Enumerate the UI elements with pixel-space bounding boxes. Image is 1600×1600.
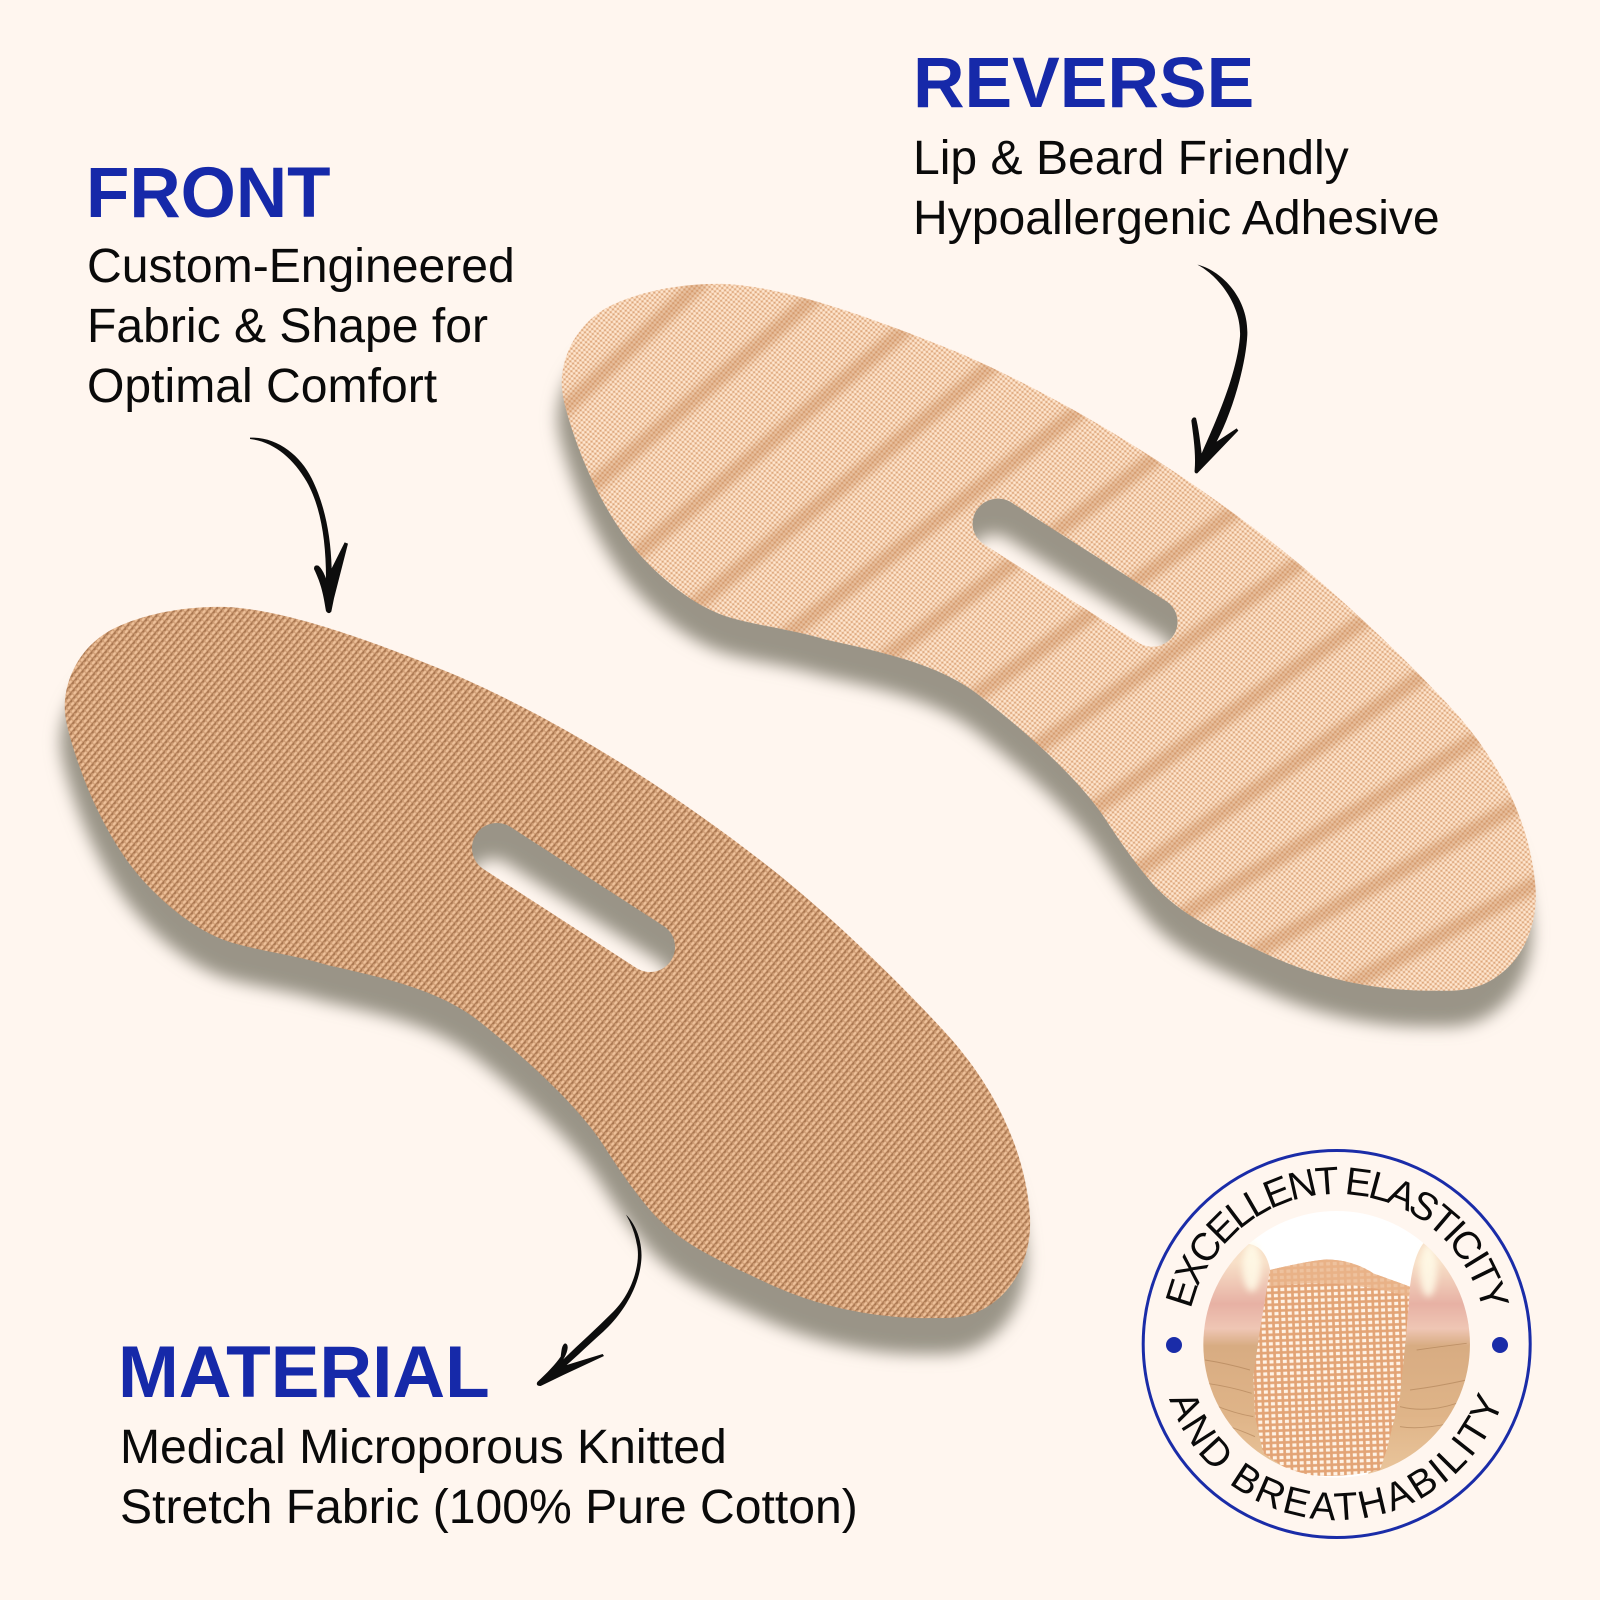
badge ring <box>1143 1150 1530 1538</box>
text: front description: Custom-Engineered <box>87 239 515 293</box>
front patch shadow <box>61 643 1026 1354</box>
stretched mesh fabric <box>1253 1259 1410 1476</box>
left finger <box>1203 1244 1285 1468</box>
reverse patch shadow <box>558 320 1532 1027</box>
arrow: reverse <box>1191 265 1247 473</box>
badge: elasticity and breathability <box>1142 1149 1532 1539</box>
finger wrinkles <box>1205 1343 1467 1437</box>
reverse patch fabric <box>562 284 1536 991</box>
reverse adhesive stripes <box>520 280 1550 1014</box>
heading: front: FRONT <box>86 154 331 233</box>
front patch fabric <box>65 607 1030 1318</box>
heading: reverse: REVERSE <box>913 43 1254 123</box>
badge photo: fingers stretching mesh <box>1203 1211 1470 1478</box>
right finger <box>1368 1244 1470 1474</box>
text: front description: Fabric & Shape for <box>87 299 488 353</box>
panel: reverse patch <box>520 280 1550 1027</box>
text: material description: Stretch Fabric (100% Pure Cotton) <box>120 1480 858 1534</box>
text: reverse description: Lip & Beard Friendly <box>913 131 1349 185</box>
arrow: material <box>537 1215 642 1386</box>
text: material description: Medical Microporous Knitted <box>120 1420 727 1474</box>
text: front description: Optimal Comfort <box>87 359 438 413</box>
arrow: front <box>250 438 348 613</box>
nail highlights <box>1242 1242 1437 1297</box>
badge text top: EXCELLENT ELASTICITY <box>1166 1166 1510 1306</box>
text: reverse description: Hypoallergenic Adhesive <box>913 191 1440 245</box>
badge text bottom: AND BREATHABILITY <box>1168 1392 1500 1520</box>
panel: front patch <box>61 607 1030 1354</box>
badge dots <box>1166 1337 1508 1353</box>
heading: material: MATERIAL <box>118 1332 490 1413</box>
dense mesh top <box>1269 1259 1410 1297</box>
